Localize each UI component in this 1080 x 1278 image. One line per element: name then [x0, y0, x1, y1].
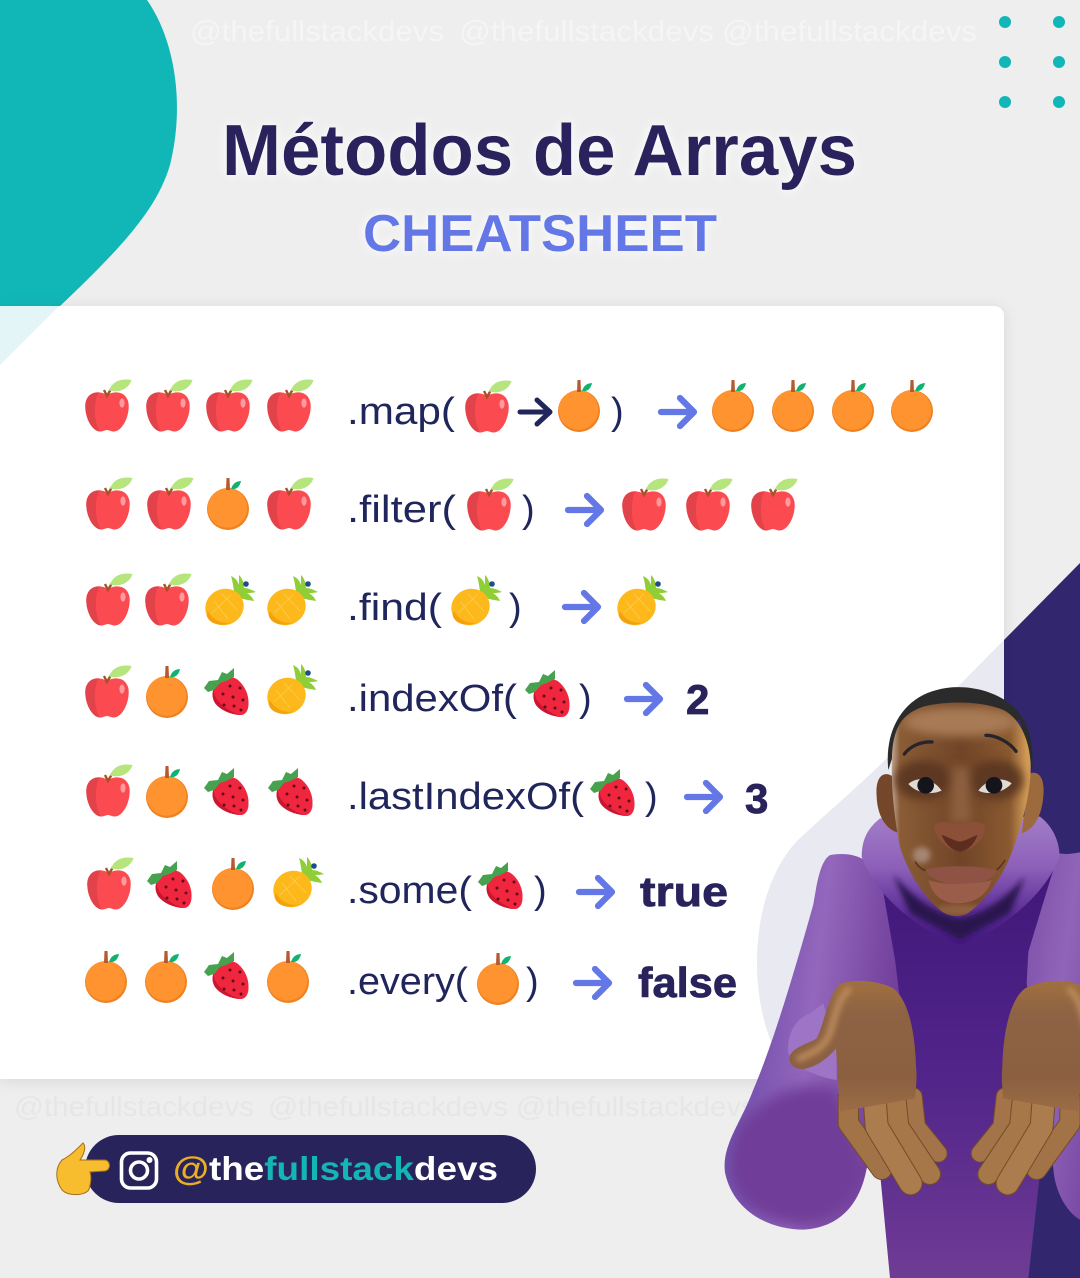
right hand — [980, 981, 1080, 1183]
row: some: ) — [534, 870, 547, 912]
decorative dots — [999, 16, 1065, 108]
icon: pointing hand — [57, 1143, 110, 1195]
row: indexOf: 2 — [686, 676, 709, 723]
row: indexOf — [85, 664, 709, 723]
top watermark: @thefullstackdevs — [190, 16, 444, 48]
row: every: ) — [526, 961, 539, 1003]
right sleeve — [1027, 852, 1080, 1220]
left sleeve — [725, 854, 907, 1230]
row: find: ) — [509, 587, 522, 629]
row: some: .some( — [347, 870, 472, 912]
neck shadow — [893, 875, 1025, 940]
row: find — [86, 573, 668, 632]
dark purple backdrop — [1004, 563, 1080, 1278]
hair — [888, 687, 1033, 772]
row: lastIndexOf — [86, 764, 768, 822]
row: map — [85, 379, 933, 433]
face — [892, 703, 1031, 916]
lower sleeve shade — [730, 1086, 863, 1226]
row: find: .find( — [347, 587, 442, 629]
hood collar — [862, 817, 1059, 945]
eyes — [908, 777, 1012, 794]
lavender blob — [757, 640, 1004, 1079]
mouth — [915, 860, 1005, 903]
row: lastIndexOf: 3 — [745, 775, 768, 822]
pale teal corner — [0, 306, 59, 365]
top watermark — [190, 16, 977, 48]
subtitle: CHEATSHEET — [363, 205, 717, 263]
row: indexOf: ) — [579, 678, 592, 720]
left cuff — [788, 1003, 837, 1080]
row: every — [85, 951, 737, 1006]
ears — [876, 774, 898, 833]
row: lastIndexOf: ) — [645, 776, 658, 818]
handle: @thefullstack devs — [173, 1150, 498, 1187]
left hand — [789, 981, 938, 1183]
top watermark: @thefullstackdevs — [459, 16, 714, 48]
torso — [863, 849, 1053, 1278]
row: filter — [86, 477, 798, 531]
row: filter: .filter( — [347, 489, 456, 531]
row: every: false — [638, 959, 737, 1006]
row: some: true — [640, 868, 728, 915]
head and hood — [862, 687, 1059, 945]
row: map: ) — [611, 391, 624, 433]
nose — [934, 822, 985, 852]
instagram pill — [57, 1135, 536, 1203]
teal blob — [0, 0, 177, 306]
row: indexOf: .indexOf( — [347, 678, 517, 720]
bottom watermark — [14, 1091, 756, 1122]
bottom watermark: @thefullstackdevs — [516, 1091, 756, 1122]
row: some — [87, 857, 728, 915]
body — [725, 849, 1080, 1278]
bottom watermark: @thefullstackdevs — [14, 1091, 254, 1122]
row: map: .map( — [347, 391, 455, 433]
row: filter: ) — [522, 489, 535, 531]
eyebrows — [904, 735, 1016, 754]
character — [725, 687, 1080, 1278]
row: lastIndexOf: .lastIndexOf( — [347, 776, 584, 818]
icon: instagram — [122, 1153, 156, 1188]
panel: cheatsheet card — [0, 306, 1004, 1079]
row: every: .every( — [347, 961, 468, 1003]
face shading — [895, 707, 1023, 916]
title: Métodos de Arrays — [222, 111, 857, 191]
top watermark: @thefullstackdevs — [722, 16, 977, 48]
bottom watermark: @thefullstackdevs — [268, 1091, 508, 1122]
